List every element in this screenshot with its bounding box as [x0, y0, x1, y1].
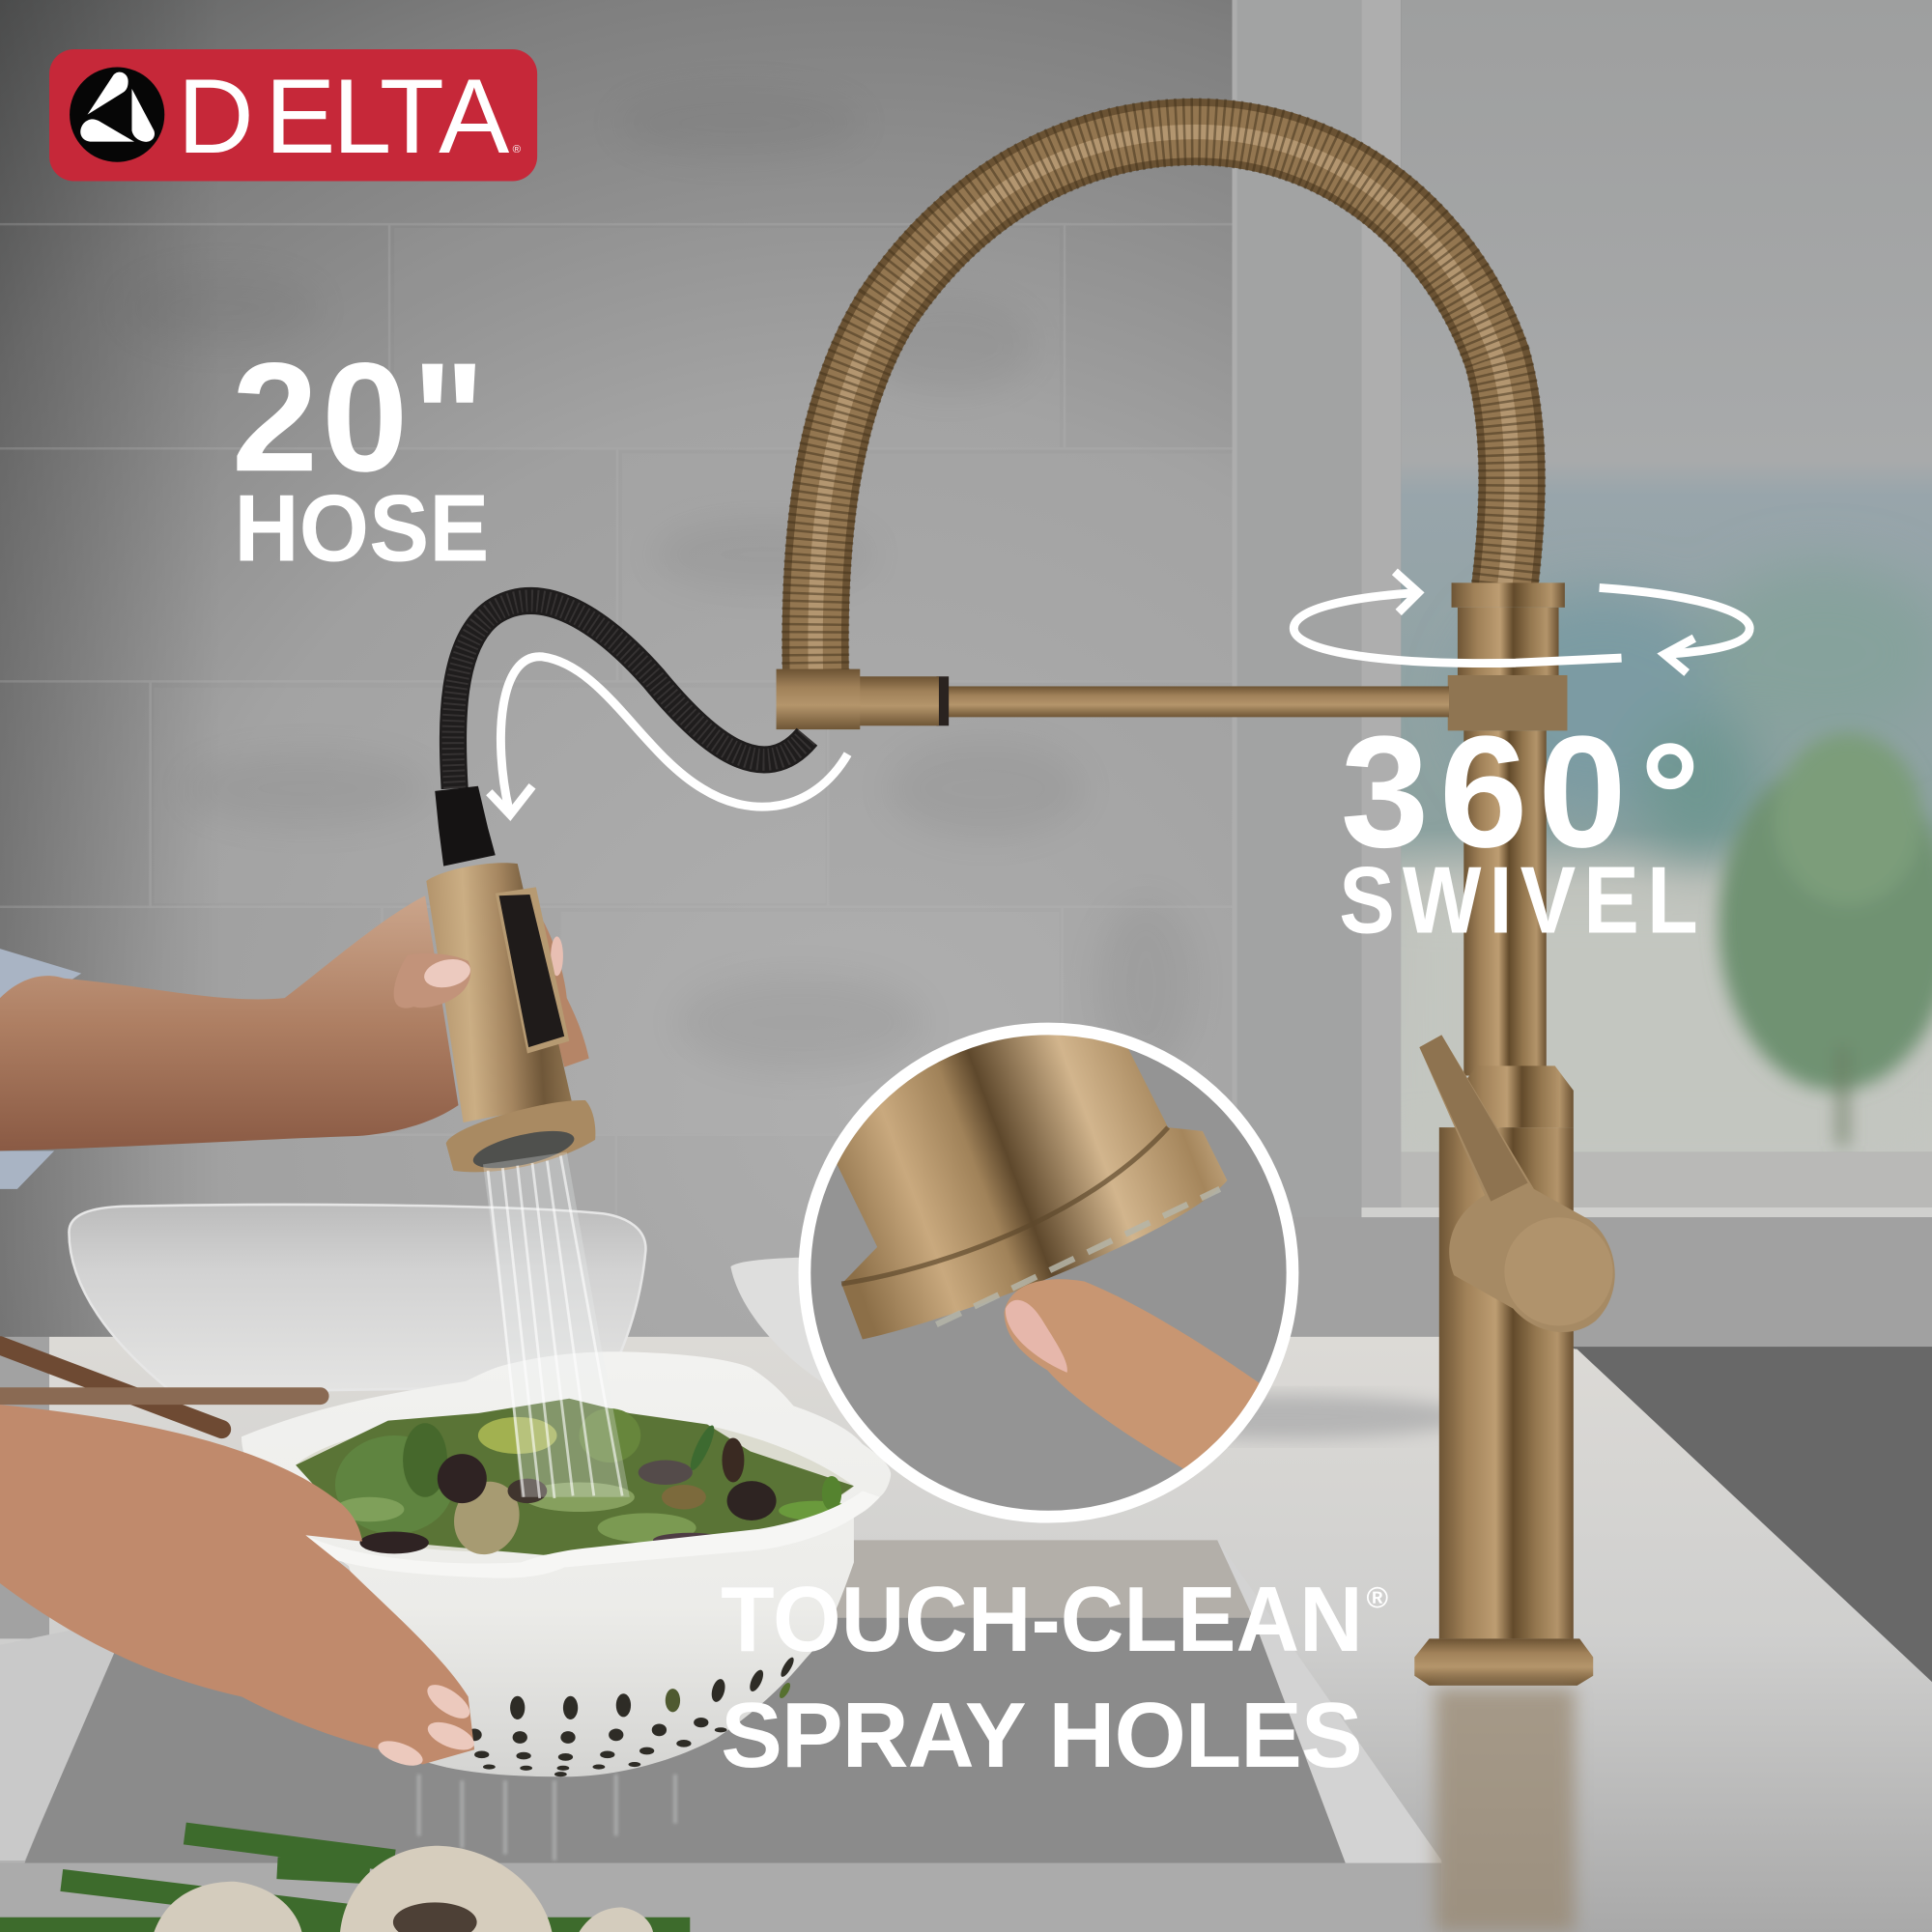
logo: Delta: ® [513, 144, 522, 156]
sprayer head close-up [828, 1023, 1227, 1339]
faucet [777, 131, 1615, 1932]
wooden utensil [0, 1346, 321, 1430]
water spray [483, 1152, 630, 1498]
inset circle: touch-clean spray face [805, 1023, 1293, 1517]
background: window view with trees [1401, 0, 1932, 1152]
callout: 360 swivel: ° [1640, 712, 1700, 880]
front rim [305, 1491, 880, 1578]
colander with salad [242, 1351, 891, 1776]
swivel collar and stem [1448, 582, 1567, 1076]
horizontal arm [777, 669, 1449, 729]
callout: touch-clean spray holes: TOUCH-CLEAN [721, 1568, 1363, 1671]
callout: touch-clean spray holes: ® [1367, 1582, 1389, 1615]
logo mark [70, 68, 164, 162]
white bowl in background [69, 1205, 850, 1399]
callout: 360 swivel [1339, 702, 1700, 953]
arrow: hose reach [489, 657, 848, 814]
thumb [394, 953, 470, 1009]
faucet body [1414, 1065, 1593, 1686]
arrows: 360 swivel [1293, 572, 1749, 672]
reflection in counter [1435, 1688, 1575, 1932]
background: wall pier and window frame [1233, 0, 1401, 1343]
callout: 20 inch hose [232, 331, 489, 581]
shirt sleeve [0, 949, 81, 1189]
callout: touch-clean spray holes [721, 1568, 1389, 1787]
callout: 20 inch hose: 20" [232, 331, 486, 504]
salad greens [296, 1399, 854, 1564]
lower hand holding colander [0, 1405, 478, 1771]
handle lever [1419, 1035, 1615, 1332]
colander holes [435, 1656, 796, 1776]
coiled spring spout [815, 131, 1512, 671]
green onions and mushrooms [0, 1833, 690, 1932]
callout: 360 swivel: SWIVEL [1339, 846, 1698, 953]
fingertip [1005, 1279, 1269, 1479]
background: white countertop and sink [0, 1337, 1932, 1932]
callout: 20 inch hose: HOSE [234, 474, 489, 581]
logo: Delta [49, 49, 537, 181]
arm and hand holding sprayer [0, 895, 589, 1189]
wordmark: DELTA [178, 58, 509, 176]
background: window sill and lower wall [1233, 1152, 1932, 1686]
callout: 360 swivel: 360 [1341, 702, 1627, 880]
black braided hose [453, 601, 807, 788]
pull-down sprayer [394, 786, 595, 1176]
dripping water [419, 1775, 675, 1861]
callout: touch-clean spray holes: SPRAY HOLES [721, 1684, 1363, 1787]
